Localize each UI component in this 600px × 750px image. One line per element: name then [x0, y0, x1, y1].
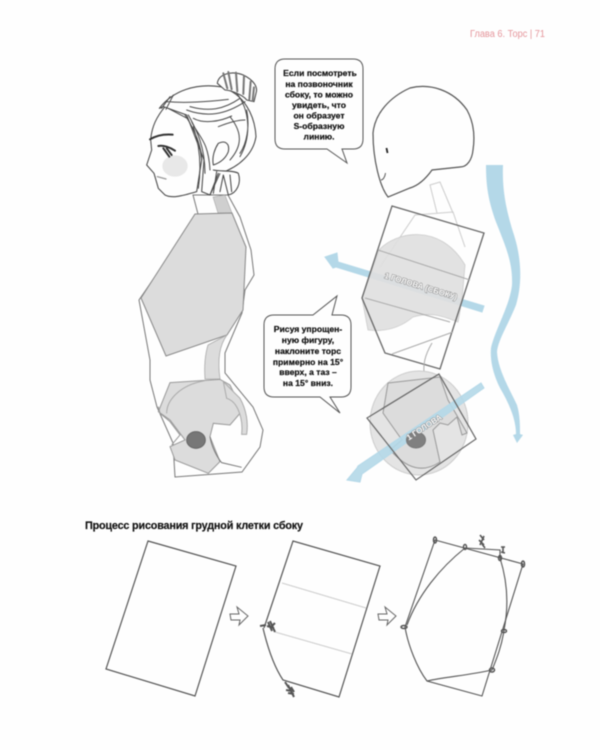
arrow 1: [230, 607, 248, 625]
step 1: rectangle: [106, 541, 236, 696]
speech bubble: spine: на позвоночник: [285, 79, 353, 89]
head and hair: [147, 72, 257, 197]
pelvis blob: [370, 371, 468, 475]
speech bubble: tilt: вверх, а таз –: [279, 367, 337, 377]
speech bubble: tilt: [264, 296, 351, 413]
body outline and gray torso: [139, 195, 263, 477]
step 3: rib cage contour: [401, 535, 524, 696]
speech bubble: tilt: на 15° вниз.: [283, 378, 333, 388]
head-size label, pelvis: 1 ГОЛОВА: [405, 413, 444, 442]
section title: Процесс рисования грудной клетки сбоку: [85, 520, 303, 532]
page header: Глава 6. Торс | 71: [470, 29, 545, 40]
speech bubble: tilt: примерно на 15°: [273, 357, 344, 367]
neck and shoulders: [380, 182, 465, 267]
speech bubble: tilt: ную фигуру,: [282, 335, 334, 345]
speech bubble: spine: он образует: [293, 110, 345, 120]
step 2: rectangle with guides: [260, 541, 380, 697]
bottom axis arrow: [347, 383, 484, 482]
speech bubble: spine: [275, 59, 363, 163]
speech bubble: spine: Если посмотреть: [283, 68, 357, 78]
speech bubble: tilt: наклоните торс: [275, 346, 341, 356]
top horizontal axis arrow: [325, 253, 484, 312]
arrow 2: [378, 607, 396, 625]
rib box: [362, 206, 484, 369]
speech bubble: tilt: Рисуя упрощен-: [274, 324, 342, 334]
pelvis: [158, 379, 247, 473]
pelvis box: [367, 374, 476, 480]
simplified head: [373, 86, 474, 197]
right figure: simplified mannequin: [325, 86, 523, 482]
speech bubble: spine: линию.: [304, 132, 334, 142]
speech bubble: spine: сбоку, то можно: [285, 90, 353, 100]
head-size label, rib cage: 1 ГОЛОВА (СБОКУ): [383, 271, 459, 302]
pelvis inner shape: [383, 377, 467, 468]
speech bubble: spine: увидеть, что: [292, 100, 346, 110]
eye: [386, 148, 388, 153]
speech bubble: spine: S-образную: [294, 121, 344, 131]
pelvis marker circle: [406, 432, 426, 448]
rib box guides: [365, 250, 470, 379]
rib cage dome: [362, 235, 465, 330]
left figure: girl in profile: [139, 72, 263, 477]
mouth: [381, 173, 386, 180]
S-curve spine arrow: [486, 165, 523, 443]
